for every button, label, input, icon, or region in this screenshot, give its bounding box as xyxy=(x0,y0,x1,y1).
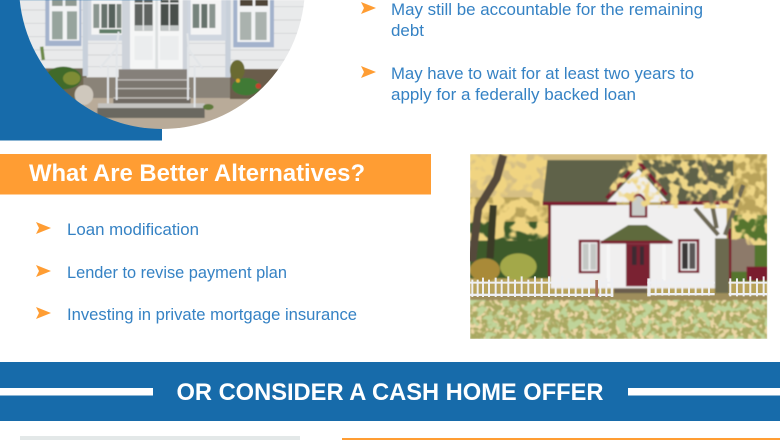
foliage xyxy=(603,154,767,245)
window far right xyxy=(233,0,274,47)
window mid right xyxy=(187,0,226,41)
left window xyxy=(579,240,600,273)
roof xyxy=(543,160,733,202)
planters and shrubs xyxy=(45,67,81,89)
bullet: two year wait xyxy=(361,64,694,104)
bullet: two year wait: May have to wait for at least two years to xyxy=(391,64,694,83)
bullet: loan modification: Loan modification xyxy=(67,220,199,239)
lawn xyxy=(470,293,767,339)
porch step xyxy=(614,288,647,294)
heading: What Are Better Alternatives?: What Are Better Alternatives? xyxy=(29,160,365,187)
photo: white house porch in circle xyxy=(20,0,304,129)
wall xyxy=(20,0,304,78)
railings xyxy=(106,30,120,104)
banner: or consider a cash home offer xyxy=(0,362,780,421)
steps xyxy=(119,69,188,80)
banner: or consider a cash home offer: OR CONSIDER A CASH HOME OFFER xyxy=(176,379,604,406)
bullet: revise payment plan: Lender to revise payment plan xyxy=(67,263,287,282)
photo: white house with autumn trees xyxy=(470,154,767,339)
blue corner panel xyxy=(0,0,162,140)
porch roof xyxy=(601,225,672,241)
white picket fence xyxy=(470,276,767,297)
right window xyxy=(678,239,699,273)
big tree xyxy=(714,238,730,294)
double door xyxy=(130,0,183,69)
mailbox xyxy=(595,279,598,297)
bullet: mortgage insurance: Investing in private mortgage insurance xyxy=(67,305,357,324)
porch door xyxy=(626,244,650,286)
ground xyxy=(20,68,87,145)
heading: What Are Better Alternatives? xyxy=(0,154,431,194)
background trees xyxy=(470,154,767,294)
dormer window xyxy=(629,193,647,218)
bullet: two year wait: apply for a federally backed loan xyxy=(391,85,636,104)
bullet: remaining debt: May still be accountable for the remaining xyxy=(391,0,703,19)
window far left xyxy=(45,0,81,46)
wall xyxy=(551,205,727,288)
bullet: remaining debt: debt xyxy=(391,21,424,40)
bullet list: consequences xyxy=(361,0,703,104)
bullet: remaining debt xyxy=(361,0,703,40)
bullet list: alternatives xyxy=(36,220,357,324)
next section: photo top edge xyxy=(20,436,300,440)
window mid left xyxy=(87,0,126,41)
porch columns xyxy=(83,0,88,76)
next section: orange heading top edge xyxy=(342,438,780,440)
